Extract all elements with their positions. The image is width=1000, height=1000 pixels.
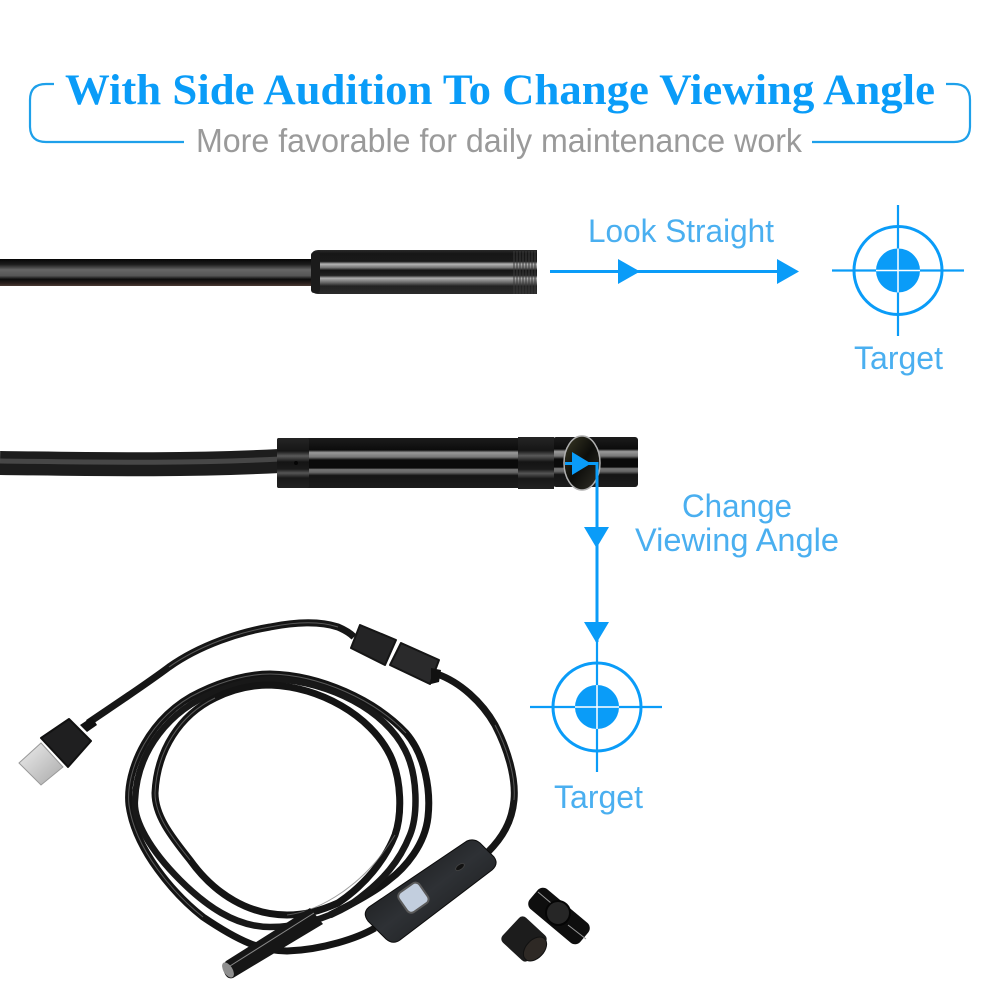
label: change viewing angle: [635, 488, 839, 558]
usb cable: [88, 623, 354, 723]
inline controller: [365, 840, 496, 942]
label: change viewing angle: Change: [682, 488, 792, 524]
probe thread: [514, 251, 535, 294]
usb metal plug: [19, 743, 63, 785]
arrow: look straight: [550, 259, 799, 284]
side probe collar: [518, 437, 554, 489]
cable to controller: [437, 674, 514, 852]
probe cable: [0, 259, 314, 286]
controller led button: [396, 881, 431, 915]
probe head: [311, 250, 537, 294]
side probe window: [564, 436, 600, 490]
label: change viewing angle: Viewing Angle: [635, 522, 839, 558]
side probe tip: [553, 437, 638, 487]
icon: target side: [530, 640, 662, 772]
coiled cable middle: [135, 679, 415, 927]
connector male: [351, 625, 396, 665]
label: look straight: Look Straight: [588, 213, 774, 249]
label: target side: Target: [554, 779, 643, 815]
cable highlights: [129, 623, 514, 917]
connector female: [390, 643, 439, 684]
controller indicator: [454, 862, 466, 872]
product photo: endoscope cable set: [19, 623, 593, 980]
side probe cable: [0, 461, 280, 464]
camera probe tip: [223, 908, 323, 978]
spare side tube accessory: [525, 885, 593, 947]
coiled cable outer: [129, 674, 429, 951]
usb plug body: [41, 719, 91, 767]
usb strain relief: [80, 717, 97, 732]
title bracket frame: [30, 84, 970, 142]
side probe body: [277, 438, 520, 488]
side probe cap: [277, 438, 309, 488]
arrow: changed viewing angle: [565, 452, 609, 643]
connector strain relief: [431, 668, 441, 684]
side view camera probe: [0, 436, 638, 490]
label: target straight: Target: [854, 340, 943, 376]
spare sleeve accessory: [499, 914, 551, 965]
probe neck: [311, 252, 320, 293]
coiled cable inner: [155, 685, 400, 915]
subtitle: More favorable for daily maintenance work: [196, 122, 802, 159]
icon: target straight: [832, 205, 964, 336]
title: With Side Audition To Change Viewing Angle: [65, 67, 935, 114]
straight camera probe: [0, 250, 537, 294]
